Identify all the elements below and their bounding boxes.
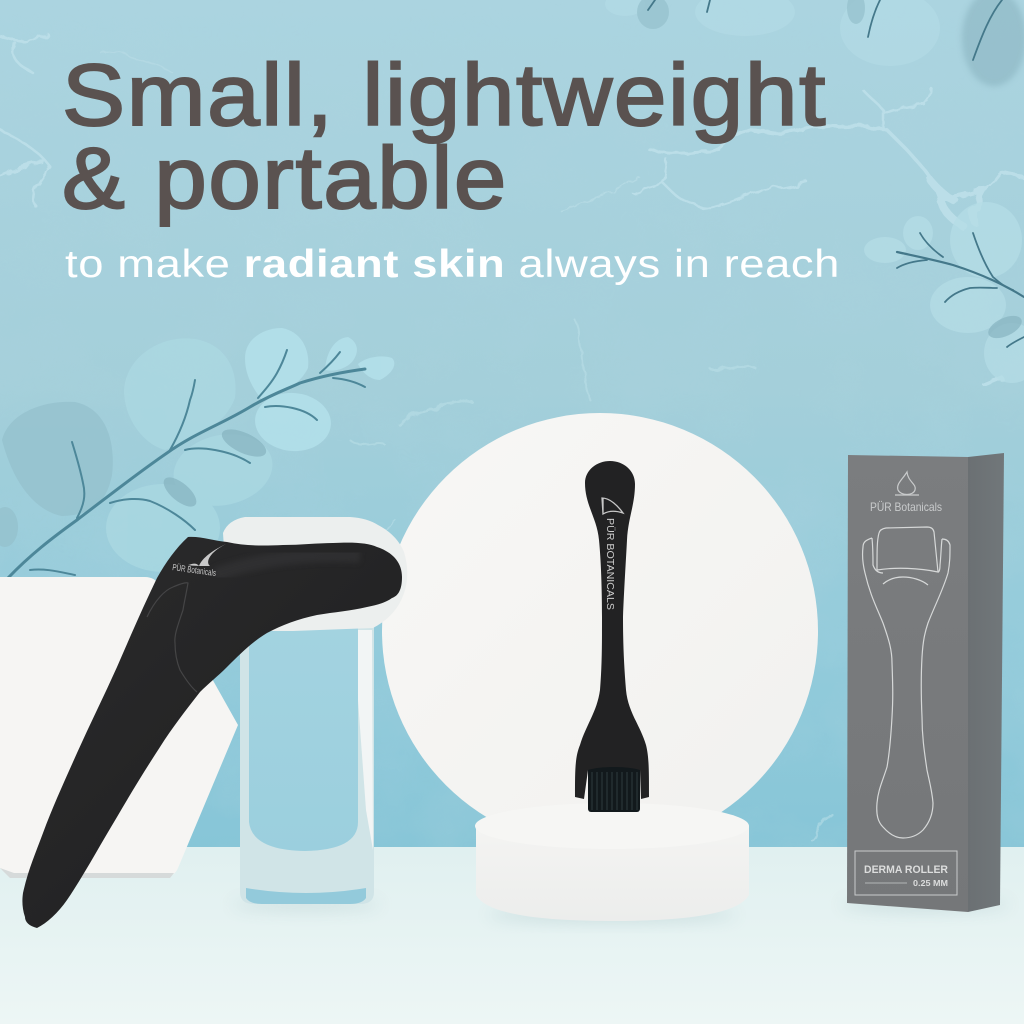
white circular disc xyxy=(382,413,818,849)
derma roller label xyxy=(855,851,957,895)
icon: botanical branch right xyxy=(864,202,1024,383)
derma roller standing xyxy=(575,461,649,812)
derma roller label: DERMA ROLLER xyxy=(864,864,948,876)
box logo xyxy=(895,472,919,495)
roller head xyxy=(588,766,640,812)
derma roller lying handle xyxy=(22,537,402,928)
title: Small, lightweight xyxy=(62,47,827,144)
brand text on handle xyxy=(172,544,226,578)
white cube on glass xyxy=(223,517,407,631)
derma roller label: 0.25 MM xyxy=(913,878,948,888)
box roller outline xyxy=(863,527,950,838)
handle highlight xyxy=(215,555,360,575)
floor xyxy=(0,847,1024,1024)
floor shadows xyxy=(231,899,1010,922)
product box xyxy=(847,453,1004,912)
white cylinder plinth xyxy=(475,803,749,921)
logo mark xyxy=(602,498,623,514)
title xyxy=(62,47,827,227)
glass cylinder xyxy=(240,622,374,904)
brand text on handle: PÜR Botanicals xyxy=(172,562,217,578)
white hexagon block xyxy=(0,577,238,878)
icon: botanical branch top xyxy=(605,0,1024,86)
marble veining xyxy=(0,34,1024,840)
box brand: PÜR Botanicals xyxy=(870,500,942,514)
brand text: PÜR BOTANICALS xyxy=(604,518,616,610)
handle groove xyxy=(147,583,197,692)
title: & portable xyxy=(62,130,508,227)
subtitle: to make radiant skin always in reach xyxy=(65,243,840,286)
handle xyxy=(575,461,649,799)
icon: botanical branch left xyxy=(0,328,394,578)
